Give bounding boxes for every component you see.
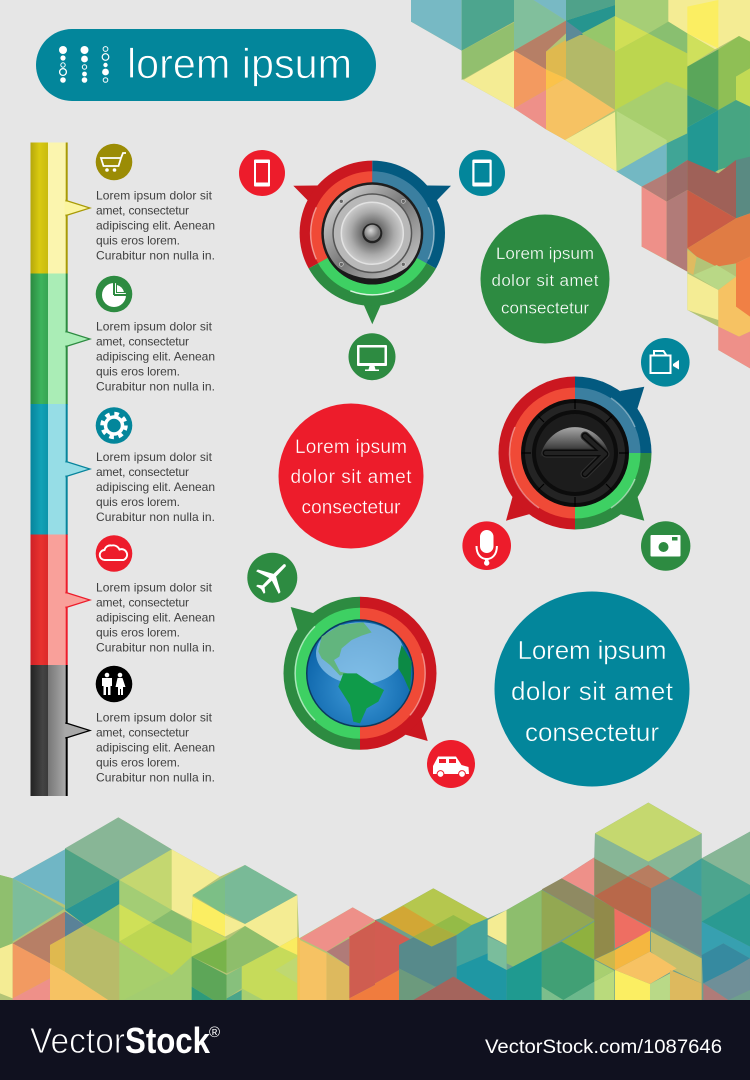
icon: pie chart bbox=[96, 276, 132, 312]
pointer: green bbox=[361, 299, 383, 324]
text block 3: Curabitur non nulla in. bbox=[96, 510, 215, 524]
green text circle bbox=[480, 214, 610, 344]
text block 1: amet, consectetur bbox=[96, 204, 189, 218]
text block 1: Curabitur non nulla in. bbox=[96, 248, 215, 262]
green text circle: consectetur bbox=[501, 298, 589, 318]
text block 3: quis eros lorem. bbox=[96, 495, 180, 509]
footer bar: ® bbox=[209, 1024, 220, 1041]
title banner bbox=[36, 29, 376, 101]
pointer: red bbox=[293, 185, 337, 215]
teal text circle: Lorem ipsum bbox=[518, 635, 666, 665]
footer url: VectorStock.com/1087646 bbox=[485, 1036, 722, 1058]
text block 5: adipiscing elit. Aenean bbox=[96, 740, 215, 754]
icon: man and woman bbox=[96, 666, 132, 702]
decorative hexagons: bottom right bbox=[375, 803, 750, 1000]
text block 5: quis eros lorem. bbox=[96, 756, 180, 770]
outer ring bbox=[300, 161, 445, 306]
bar segment: red bbox=[30, 534, 90, 666]
pointer: blue bbox=[620, 387, 644, 410]
pointer: blue bbox=[407, 185, 451, 215]
icon: car bbox=[427, 740, 475, 788]
text block 2: Curabitur non nulla in. bbox=[96, 380, 215, 394]
text block 4 bbox=[96, 580, 215, 654]
icon: photo camera bbox=[641, 521, 690, 571]
text block 3 bbox=[96, 450, 215, 524]
text block 1: adipiscing elit. Aenean bbox=[96, 218, 215, 232]
teal text circle: dolor sit amet bbox=[511, 676, 674, 706]
arrow button dial widget bbox=[498, 376, 652, 530]
icon: airplane bbox=[247, 553, 297, 603]
icon: microphone bbox=[462, 521, 511, 570]
text block 2: quis eros lorem. bbox=[96, 364, 180, 378]
pointer: red bbox=[404, 716, 428, 741]
inner ring bbox=[310, 171, 434, 295]
icon: monitor bbox=[348, 333, 396, 380]
pointer: green bbox=[291, 607, 314, 631]
text block 5 bbox=[96, 710, 215, 784]
icon: video camera bbox=[641, 338, 690, 387]
outer ring bbox=[498, 376, 652, 530]
bar segment: green bbox=[30, 274, 90, 404]
text block 4: quis eros lorem. bbox=[96, 626, 180, 640]
text block 3: Lorem ipsum dolor sit bbox=[96, 450, 213, 464]
footer logo: Vector bbox=[30, 1020, 125, 1061]
red text circle bbox=[278, 404, 424, 548]
text block 4: Lorem ipsum dolor sit bbox=[96, 580, 213, 594]
red text circle: dolor sit amet bbox=[290, 467, 412, 488]
vertical colour bar with five tabs bbox=[30, 142, 90, 796]
bar segment: yellow bbox=[30, 142, 90, 274]
icon: cloud bbox=[96, 535, 132, 572]
green text circle: dolor sit amet bbox=[492, 271, 599, 290]
icon: smartphone bbox=[239, 150, 285, 196]
red text circle: consectetur bbox=[302, 498, 401, 518]
pointer: red bbox=[506, 495, 530, 521]
decorative hexagons: bottom left bbox=[0, 817, 375, 1000]
arrow button bbox=[521, 399, 629, 507]
text block 2: adipiscing elit. Aenean bbox=[96, 350, 215, 364]
text block 1: Lorem ipsum dolor sit bbox=[96, 188, 213, 202]
text block 1: quis eros lorem. bbox=[96, 234, 180, 248]
pointer: green bbox=[620, 495, 644, 521]
text block 5: Curabitur non nulla in. bbox=[96, 770, 215, 784]
footer bar: Stock bbox=[125, 1020, 211, 1061]
inner ring bbox=[509, 388, 640, 518]
icon: dotted columns bbox=[59, 46, 109, 83]
globe bbox=[306, 619, 414, 727]
teal text circle: consectetur bbox=[525, 717, 659, 747]
bar segment: black bbox=[30, 665, 90, 796]
text block 5: amet, consectetur bbox=[96, 726, 189, 740]
text block 2: Lorem ipsum dolor sit bbox=[96, 320, 213, 334]
text block 4: amet, consectetur bbox=[96, 596, 189, 610]
text block 2: amet, consectetur bbox=[96, 334, 189, 348]
speaker dial widget bbox=[293, 161, 451, 324]
red text circle: Lorem ipsum bbox=[295, 437, 407, 458]
text block 4: Curabitur non nulla in. bbox=[96, 640, 215, 654]
title text: lorem ipsum bbox=[127, 40, 352, 87]
icon: gear bbox=[96, 407, 132, 444]
text block 1 bbox=[96, 188, 215, 262]
outer ring bbox=[284, 597, 436, 750]
inner ring bbox=[294, 608, 426, 739]
bar segment: teal bbox=[30, 404, 90, 535]
text block 5: Lorem ipsum dolor sit bbox=[96, 710, 213, 724]
decorative hexagons: top right bbox=[411, 0, 750, 368]
icon: tablet bbox=[459, 150, 505, 196]
globe dial widget bbox=[284, 597, 436, 750]
text block 4: adipiscing elit. Aenean bbox=[96, 610, 215, 624]
text block 2 bbox=[96, 320, 215, 394]
icon: shopping cart bbox=[96, 144, 132, 180]
speaker bbox=[321, 182, 423, 285]
teal text circle bbox=[494, 592, 690, 786]
footer bar bbox=[0, 1000, 750, 1080]
green text circle: Lorem ipsum bbox=[496, 244, 594, 263]
text block 3: amet, consectetur bbox=[96, 465, 189, 479]
text block 3: adipiscing elit. Aenean bbox=[96, 480, 215, 494]
